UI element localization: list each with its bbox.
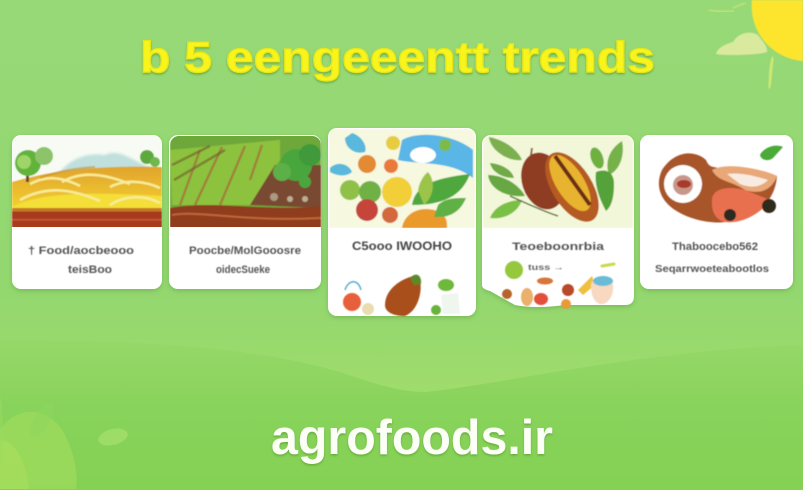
label <box>189 245 301 276</box>
label <box>655 241 769 275</box>
title: b 5 eengeeentt trends <box>140 33 655 82</box>
label: Teoeboonrbia <box>512 241 605 253</box>
label: C5ooo IWOOHO <box>352 239 452 253</box>
decoration: faint leaves bottom left <box>0 395 129 489</box>
crop illustration <box>170 135 321 230</box>
meat illustration <box>659 146 783 222</box>
label: Seqarrwoeteabootlos <box>655 263 769 275</box>
small food icons <box>343 275 460 316</box>
label: oidecSueke <box>216 264 270 276</box>
bouquet illustration <box>329 129 475 228</box>
label: Thaboocebo562 <box>672 241 758 253</box>
card 5: cooked meat <box>640 135 793 289</box>
card 4: dates and snacks: tuss → <box>528 262 564 272</box>
small food icons <box>502 261 614 309</box>
label: teisBoo <box>68 264 112 276</box>
card 2: crop field <box>169 135 321 289</box>
fruit illustration <box>483 136 633 231</box>
card 3: food bouquet <box>328 128 476 316</box>
card 1: soil field <box>12 135 162 289</box>
label: † Food/aocbeooo <box>28 245 134 257</box>
label <box>28 245 134 276</box>
field illustration <box>12 135 162 230</box>
label: Poocbe/MolGooosre <box>189 245 301 257</box>
brand name: agrofoods.ir <box>271 411 553 465</box>
icon: cloud <box>716 33 767 55</box>
icon: sun with rays <box>709 0 803 87</box>
card 4: dates and snacks <box>482 135 634 309</box>
